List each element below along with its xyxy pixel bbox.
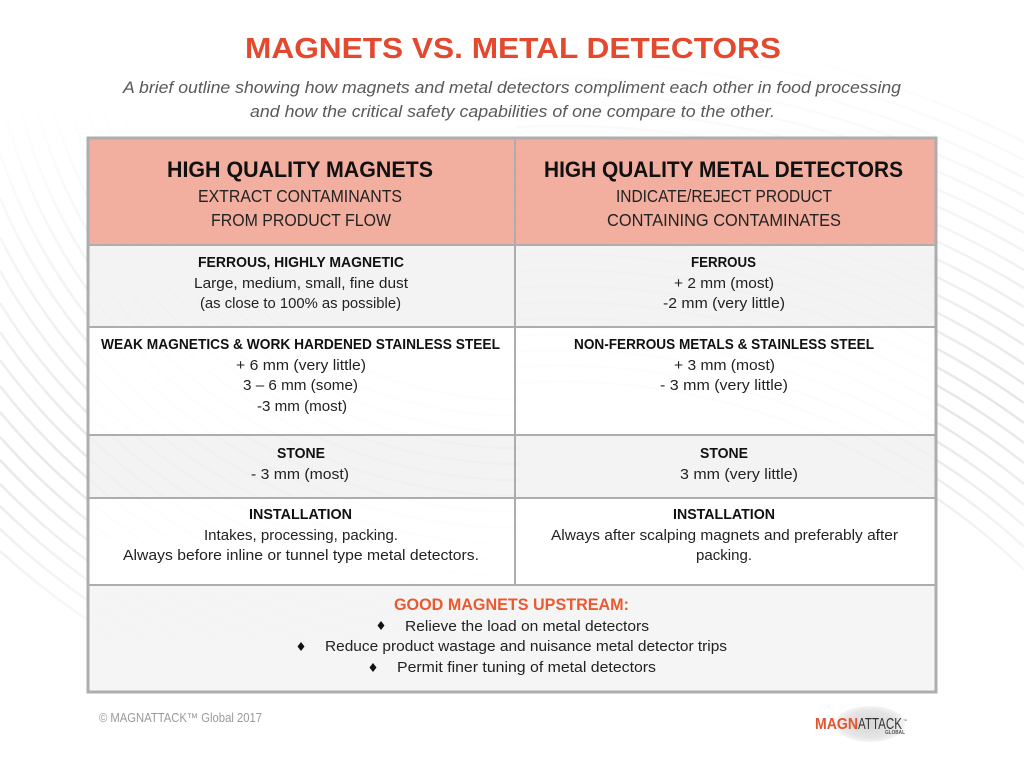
row 1 detectors: ferrous: FERROUS (691, 254, 756, 271)
header: metal detectors (544, 157, 903, 230)
header: magnets: HIGH QUALITY MAGNETS (167, 157, 433, 182)
comparison table (88, 138, 936, 692)
row 2 detectors: non-ferrous: - 3 mm (very little) (660, 377, 788, 394)
row 1 detectors: ferrous: + 2 mm (most) (674, 275, 774, 292)
row 2 magnets: weak magnetics: -3 mm (most) (257, 398, 347, 415)
header: metal detectors: INDICATE/REJECT PRODUCT (616, 186, 832, 206)
row 4 magnets: installation (123, 506, 479, 564)
row 1 detectors: ferrous: -2 mm (very little) (663, 295, 785, 312)
row 1 magnets: ferrous: Large, medium, small, fine dust (194, 275, 409, 292)
row 2 detectors: non-ferrous: + 3 mm (most) (674, 357, 775, 374)
logo: MAGNATTACK Global: ATTACK (858, 716, 902, 733)
icon: globe (835, 706, 905, 742)
row 2 detectors: non-ferrous: NON-FERROUS METALS & STAINLESS STEEL (574, 336, 874, 353)
header: metal detectors: CONTAINING CONTAMINATES (607, 210, 841, 230)
row 2 magnets: weak magnetics: + 6 mm (very little) (236, 357, 366, 374)
row 2 magnets: weak magnetics (101, 336, 500, 415)
logo: MAGNATTACK Global (815, 706, 907, 742)
row 1 magnets: ferrous: (as close to 100% as possible) (200, 295, 401, 312)
logo: MAGNATTACK Global: ™ (903, 718, 907, 723)
row 3 magnets: stone (251, 445, 349, 483)
title: MAGNETS VS. METAL DETECTORS (245, 33, 781, 65)
header: magnets: EXTRACT CONTAMINANTS (198, 186, 402, 206)
row 4 magnets: installation: Intakes, processing, packing. (204, 527, 398, 544)
bullet: relieve the load: Relieve the load on metal detectors (405, 618, 649, 635)
logo wordmark: MAGN (815, 716, 858, 733)
panel heading: GOOD MAGNETS UPSTREAM: (394, 595, 629, 614)
row 4 detectors: installation: packing. (696, 547, 752, 564)
row 3 magnets: stone: STONE (277, 445, 325, 462)
table grid lines (88, 138, 936, 692)
bullet: finer tuning: Permit finer tuning of metal detectors (397, 659, 656, 676)
row 1 detectors: ferrous (663, 254, 785, 312)
subtitle (122, 78, 902, 121)
subtitle: and how the critical safety capabilities of one compare to the other. (250, 102, 775, 121)
header: magnets (167, 157, 433, 230)
row 1 magnets: ferrous: FERROUS, HIGHLY MAGNETIC (198, 254, 404, 271)
good magnets upstream panel (298, 595, 727, 676)
row 2 magnets: weak magnetics: WEAK MAGNETICS & WORK HARDENED STAINLESS STEEL (101, 336, 500, 353)
row 4 magnets: installation: Always before inline or tunnel type metal detectors. (123, 547, 479, 564)
bullet: reduce wastage: Reduce product wastage and nuisance metal detector trips (325, 638, 727, 655)
row 3 detectors: stone: 3 mm (very little) (680, 466, 798, 483)
row 3 magnets: stone: - 3 mm (most) (251, 466, 349, 483)
copyright footer: © MAGNATTACK™ Global 2017 (99, 711, 262, 725)
row 4 magnets: installation: INSTALLATION (249, 506, 352, 523)
row shading (88, 245, 936, 692)
row 4 detectors: installation: Always after scalping magnets and preferably after (551, 527, 898, 544)
row 4 detectors: installation (551, 506, 898, 564)
row 2 magnets: weak magnetics: 3 – 6 mm (some) (243, 377, 358, 394)
row 3 detectors: stone (680, 445, 798, 483)
header: metal detectors: HIGH QUALITY METAL DETECTORS (544, 157, 903, 182)
row 1 magnets: ferrous (194, 254, 409, 312)
row 3 detectors: stone: STONE (700, 445, 748, 462)
header cells (88, 138, 936, 245)
header: magnets: FROM PRODUCT FLOW (211, 210, 391, 230)
row 2 detectors: non-ferrous (574, 336, 874, 394)
row 4 detectors: installation: INSTALLATION (673, 506, 775, 523)
subtitle: A brief outline showing how magnets and metal detectors compliment each other in food processing (122, 78, 902, 97)
logo: MAGNATTACK Global: GLOBAL (885, 730, 905, 736)
